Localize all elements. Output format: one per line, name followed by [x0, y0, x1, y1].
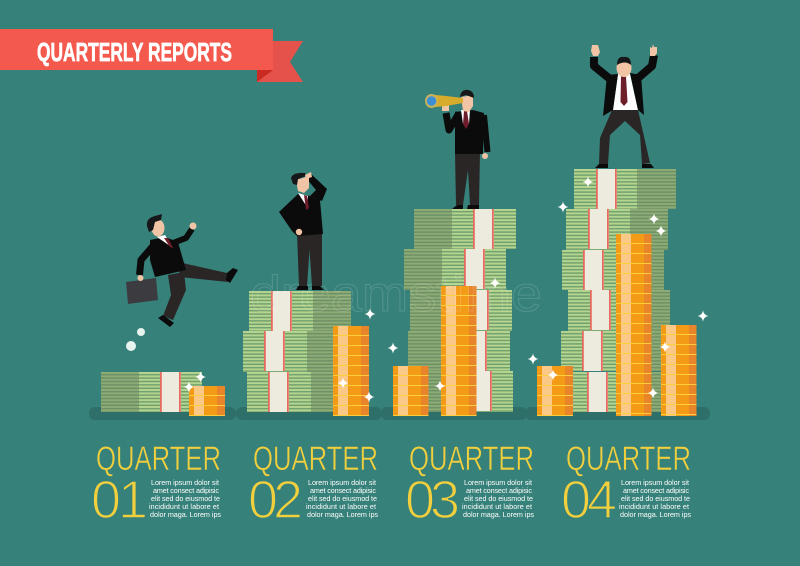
- businessman 2 looking into distance: [279, 172, 327, 290]
- watermark: dreamstime: [250, 266, 542, 322]
- quarter 03 label: incididunt ut labore et: [462, 502, 532, 511]
- dust puffs: [126, 328, 145, 351]
- quarter 04 label: incididunt ut labore et: [619, 502, 689, 511]
- quarter 03 label: amet consect adipisic: [466, 486, 532, 495]
- quarter 01 label: QUARTER: [96, 440, 221, 478]
- quarter 01 label: [91, 440, 221, 530]
- quarter 03 label: QUARTER: [409, 440, 534, 478]
- sparkles: [184, 176, 708, 402]
- quarter 02 label: incididunt ut labore et: [306, 502, 376, 511]
- quarter 04 label: Lorem ipsum dolor sit: [621, 478, 689, 487]
- quarter 03 label: dolor maga. Lorem ips: [463, 510, 534, 519]
- quarter 02 label: QUARTER: [253, 440, 378, 478]
- quarter 04 label: amet consect adipisic: [623, 486, 689, 495]
- quarter 02 label: dolor maga. Lorem ips: [307, 510, 378, 519]
- quarter 02 label: amet consect adipisic: [310, 486, 376, 495]
- quarter 04 label: elit sed do eiusmod te: [621, 494, 690, 503]
- quarter 03 label: [405, 440, 534, 530]
- quarter 3 stack: [393, 209, 516, 416]
- quarter 02 label: elit sed do eiusmod te: [308, 494, 377, 503]
- ground shadows: [89, 407, 710, 420]
- quarter 02 label: Lorem ipsum dolor sit: [308, 478, 376, 487]
- quarter 4 stack: [537, 169, 696, 416]
- quarter 01 label: elit sed do eiusmod te: [151, 494, 220, 503]
- quarter 04 label: QUARTER: [566, 440, 691, 478]
- quarter 01 label: amet consect adipisic: [153, 486, 219, 495]
- quarter 01 label: dolor maga. Lorem ips: [150, 510, 221, 519]
- businessman 1 jumping with briefcase: [126, 214, 238, 327]
- quarter 1 stack: [101, 372, 225, 416]
- quarter 01 label: 01: [91, 470, 148, 530]
- quarter 04 label: [561, 440, 691, 530]
- quarter 04 label: 04: [561, 470, 617, 530]
- quarter 2 stack: [243, 291, 369, 416]
- quarter 03 label: elit sed do eiusmod te: [464, 494, 533, 503]
- banner: quarterly reports: QUARTERLY REPORTS: [37, 37, 232, 67]
- banner: quarterly reports: [0, 29, 303, 82]
- quarter 02 label: [248, 440, 378, 530]
- quarter 03 label: 03: [405, 470, 460, 530]
- quarter 03 label: Lorem ipsum dolor sit: [464, 478, 532, 487]
- businessman 4 cheering: [591, 44, 657, 168]
- businessman 3 with telescope: [425, 90, 488, 209]
- quarter 01 label: incididunt ut labore et: [149, 502, 219, 511]
- quarter 01 label: Lorem ipsum dolor sit: [151, 478, 219, 487]
- quarter 04 label: dolor maga. Lorem ips: [620, 510, 691, 519]
- quarter 02 label: 02: [248, 470, 303, 530]
